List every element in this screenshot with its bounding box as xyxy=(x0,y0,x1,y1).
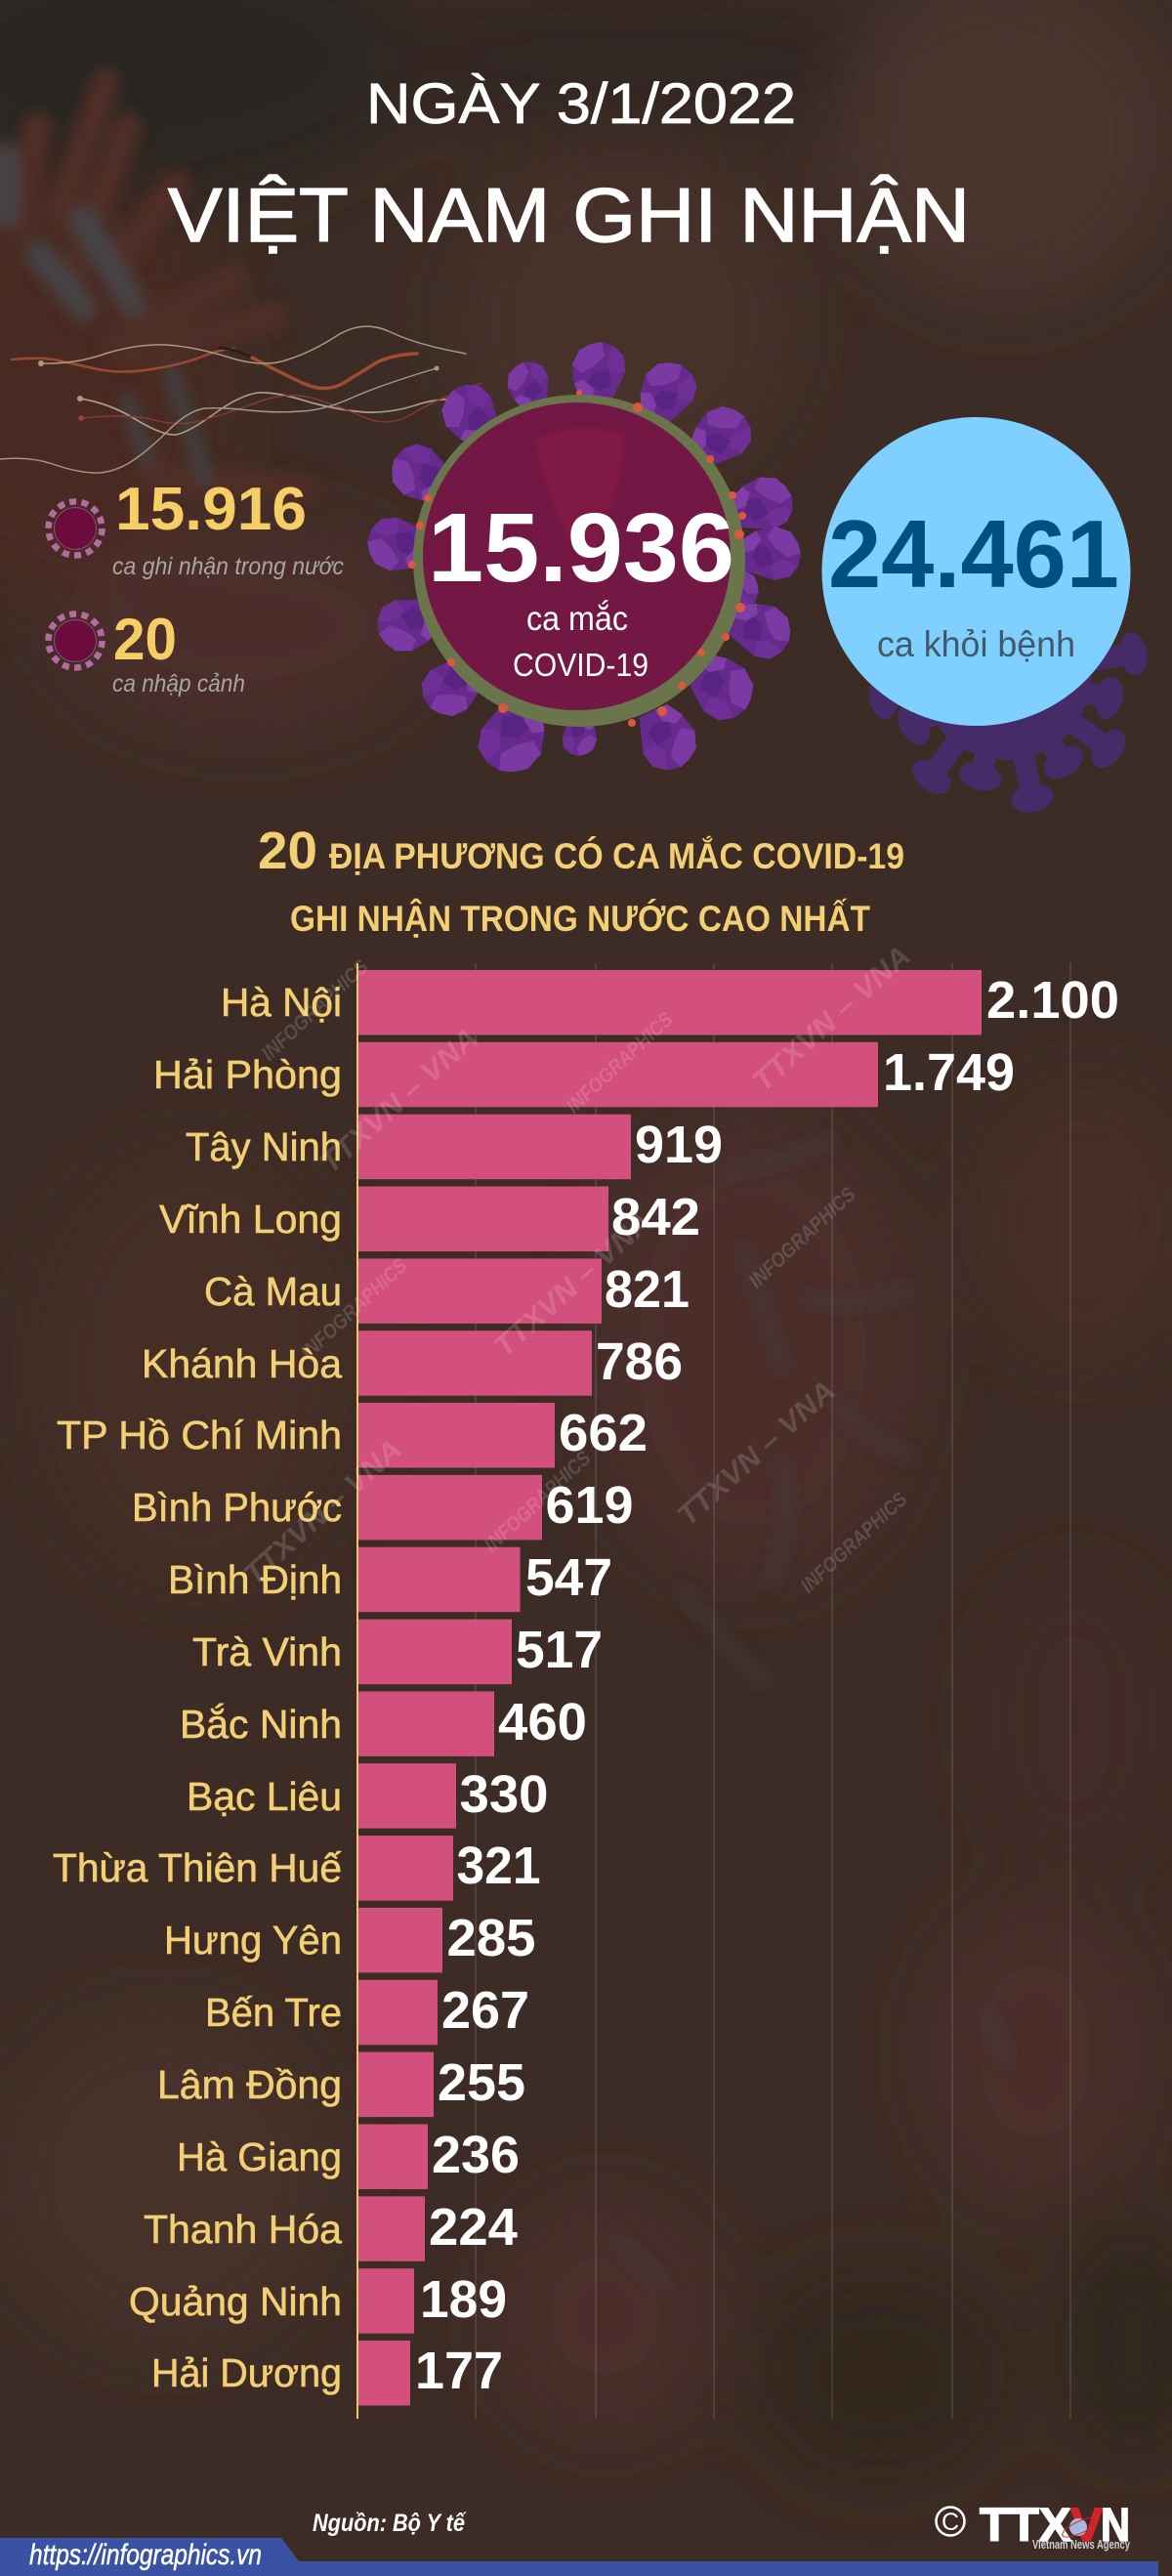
row: Thanh Hóa xyxy=(144,2196,518,2261)
watermarks: INFOGRAPHICS xyxy=(481,1447,596,1556)
row: Lâm Đồng xyxy=(157,2052,525,2117)
row: Thanh Hóa: Thanh Hóa xyxy=(144,2207,342,2252)
source note: Nguồn: Bộ Y tế xyxy=(313,2510,467,2537)
row: Bình Phước: 619 xyxy=(545,1476,633,1535)
row: Cà Mau xyxy=(204,1258,690,1324)
row: Cà Mau: 821 xyxy=(605,1260,690,1319)
caption: domestic: ca ghi nhận trong nước xyxy=(112,553,344,580)
row: Thừa Thiên Huế: Thừa Thiên Huế xyxy=(53,1845,342,1890)
footer band with url: https://infographics.vn xyxy=(29,2539,262,2571)
row: TP Hồ Chí Minh: TP Hồ Chí Minh xyxy=(57,1413,342,1457)
row: Hà Giang: 236 xyxy=(432,2126,520,2184)
row: Hưng Yên: 285 xyxy=(447,1909,535,1967)
chart heading xyxy=(258,822,904,939)
row: Tây Ninh: Tây Ninh xyxy=(186,1124,342,1169)
row: Bạc Liêu xyxy=(187,1763,549,1829)
row: Hà Giang: Hà Giang xyxy=(177,2134,342,2179)
row: Quảng Ninh xyxy=(129,2268,507,2334)
row: Tây Ninh: 919 xyxy=(635,1116,723,1174)
row: Bến Tre xyxy=(205,1980,529,2045)
watermarks: INFOGRAPHICS xyxy=(258,955,373,1065)
watermarks: TTXVN – VNA xyxy=(314,1022,484,1180)
row: Hưng Yên: Hưng Yên xyxy=(164,1918,342,1963)
logo: TTXVN: V xyxy=(1070,2500,1103,2552)
row: Bình Phước: Bình Phước xyxy=(132,1485,342,1530)
row: Bến Tre: 267 xyxy=(441,1981,529,2040)
caption: COVID-19: COVID-19 xyxy=(513,647,649,683)
row: Bến Tre: Bến Tre xyxy=(205,1990,342,2035)
row: TP Hồ Chí Minh xyxy=(57,1403,648,1467)
row: Hải Dương xyxy=(151,2341,503,2405)
logo: TTXVN: TTX xyxy=(980,2500,1071,2552)
watermarks: INFOGRAPHICS xyxy=(563,1008,678,1118)
chart heading: ĐỊA PHƯƠNG CÓ CA MẮC COVID-19 xyxy=(329,835,904,876)
row: Bình Định xyxy=(168,1547,612,1612)
row: Hải Phòng: Hải Phòng xyxy=(153,1052,342,1097)
footer band with url xyxy=(0,2538,1158,2576)
icon: small virus domestic xyxy=(49,502,102,555)
recovered circle xyxy=(822,417,1131,726)
row: Khánh Hòa xyxy=(142,1330,683,1396)
row: Thừa Thiên Huế xyxy=(53,1836,541,1901)
watermarks: TTXVN – VNA xyxy=(487,1205,658,1364)
row: Vĩnh Long: Vĩnh Long xyxy=(159,1197,342,1242)
row: Lâm Đồng: 255 xyxy=(438,2053,525,2112)
row: Trà Vinh xyxy=(192,1620,603,1684)
row: Thanh Hóa: 224 xyxy=(429,2198,518,2257)
row: Bạc Liêu: 330 xyxy=(459,1765,549,1824)
watermarks: TTXVN – VNA xyxy=(237,1433,408,1591)
row: Bình Định: 547 xyxy=(525,1548,612,1607)
watermarks: INFOGRAPHICS xyxy=(745,1183,860,1292)
row: Hải Dương: 177 xyxy=(415,2342,503,2400)
row: Lâm Đồng: Lâm Đồng xyxy=(157,2062,342,2107)
row: Khánh Hòa: 786 xyxy=(596,1332,683,1391)
row: Hải Phòng xyxy=(153,1042,1015,1107)
watermarks: INFOGRAPHICS xyxy=(797,1488,912,1597)
row: Khánh Hòa: Khánh Hòa xyxy=(142,1341,342,1386)
title: main heading: VIỆT NAM GHI NHẬN xyxy=(168,172,970,258)
icon: purple virus behind recovered circle xyxy=(865,588,1151,816)
watermarks: TTXVN – VNA xyxy=(671,1374,842,1533)
row: Hưng Yên xyxy=(164,1908,535,1972)
logo: TTXVN: Vietnam News Agency xyxy=(1032,2537,1131,2552)
row: Hà Nội xyxy=(221,970,1119,1035)
row: Trà Vinh: 517 xyxy=(516,1621,603,1679)
row: Vĩnh Long: 842 xyxy=(611,1188,700,1246)
watermarks xyxy=(237,940,917,1597)
row: Hà Nội: Hà Nội xyxy=(221,980,342,1025)
chart heading: 20 xyxy=(258,822,317,880)
stat: recovered: 24.461 xyxy=(828,500,1119,608)
row: Quảng Ninh: 189 xyxy=(420,2270,507,2329)
watermarks: INFOGRAPHICS xyxy=(297,1254,412,1364)
stat: 15.916 domestic: 15.916 xyxy=(115,476,307,543)
row: Vĩnh Long xyxy=(159,1186,700,1251)
row: Trà Vinh: Trà Vinh xyxy=(192,1629,342,1674)
grid lines xyxy=(476,963,1070,2419)
row: Thừa Thiên Huế: 321 xyxy=(457,1837,541,1895)
chart axis xyxy=(356,963,358,2419)
row: Bắc Ninh: 460 xyxy=(498,1693,587,1752)
decorative wavy lines xyxy=(0,326,481,473)
row: Hà Giang xyxy=(177,2124,520,2189)
logo: TTXVN xyxy=(936,2500,1131,2552)
bar chart: 20 provinces xyxy=(53,970,1119,2405)
stat: 20 imported: 20 xyxy=(113,607,177,672)
row: Cà Mau: Cà Mau xyxy=(204,1269,342,1314)
stat: total cases: 15.936 xyxy=(428,493,734,603)
caption: imported: ca nhập cảnh xyxy=(112,670,245,697)
row: Bình Định: Bình Định xyxy=(168,1557,342,1602)
chart heading: GHI NHẬN TRONG NƯỚC CAO NHẤT xyxy=(290,898,870,939)
watermarks: TTXVN – VNA xyxy=(746,940,917,1098)
logo: TTXVN: C xyxy=(942,2509,959,2536)
row: Hà Nội: 2.100 xyxy=(986,971,1119,1030)
row: Hải Phòng: 1.749 xyxy=(883,1043,1015,1102)
row: Bạc Liêu: Bạc Liêu xyxy=(187,1774,342,1819)
row: Bắc Ninh xyxy=(180,1691,587,1756)
row: Bắc Ninh: Bắc Ninh xyxy=(180,1702,342,1747)
caption: ca mắc: ca mắc xyxy=(526,600,628,638)
row: Hải Dương: Hải Dương xyxy=(151,2350,342,2395)
row: Bình Phước xyxy=(132,1475,633,1540)
row: TP Hồ Chí Minh: 662 xyxy=(559,1404,648,1462)
logo: TTXVN: N xyxy=(1101,2500,1130,2552)
row: Tây Ninh xyxy=(186,1115,723,1179)
title: date: NGÀY 3/1/2022 xyxy=(366,72,796,136)
caption: recovered: ca khỏi bệnh xyxy=(877,624,1075,664)
main virus illustration with total cases xyxy=(365,339,802,782)
row: Quảng Ninh: Quảng Ninh xyxy=(129,2279,342,2324)
icon: small virus imported xyxy=(49,613,102,668)
